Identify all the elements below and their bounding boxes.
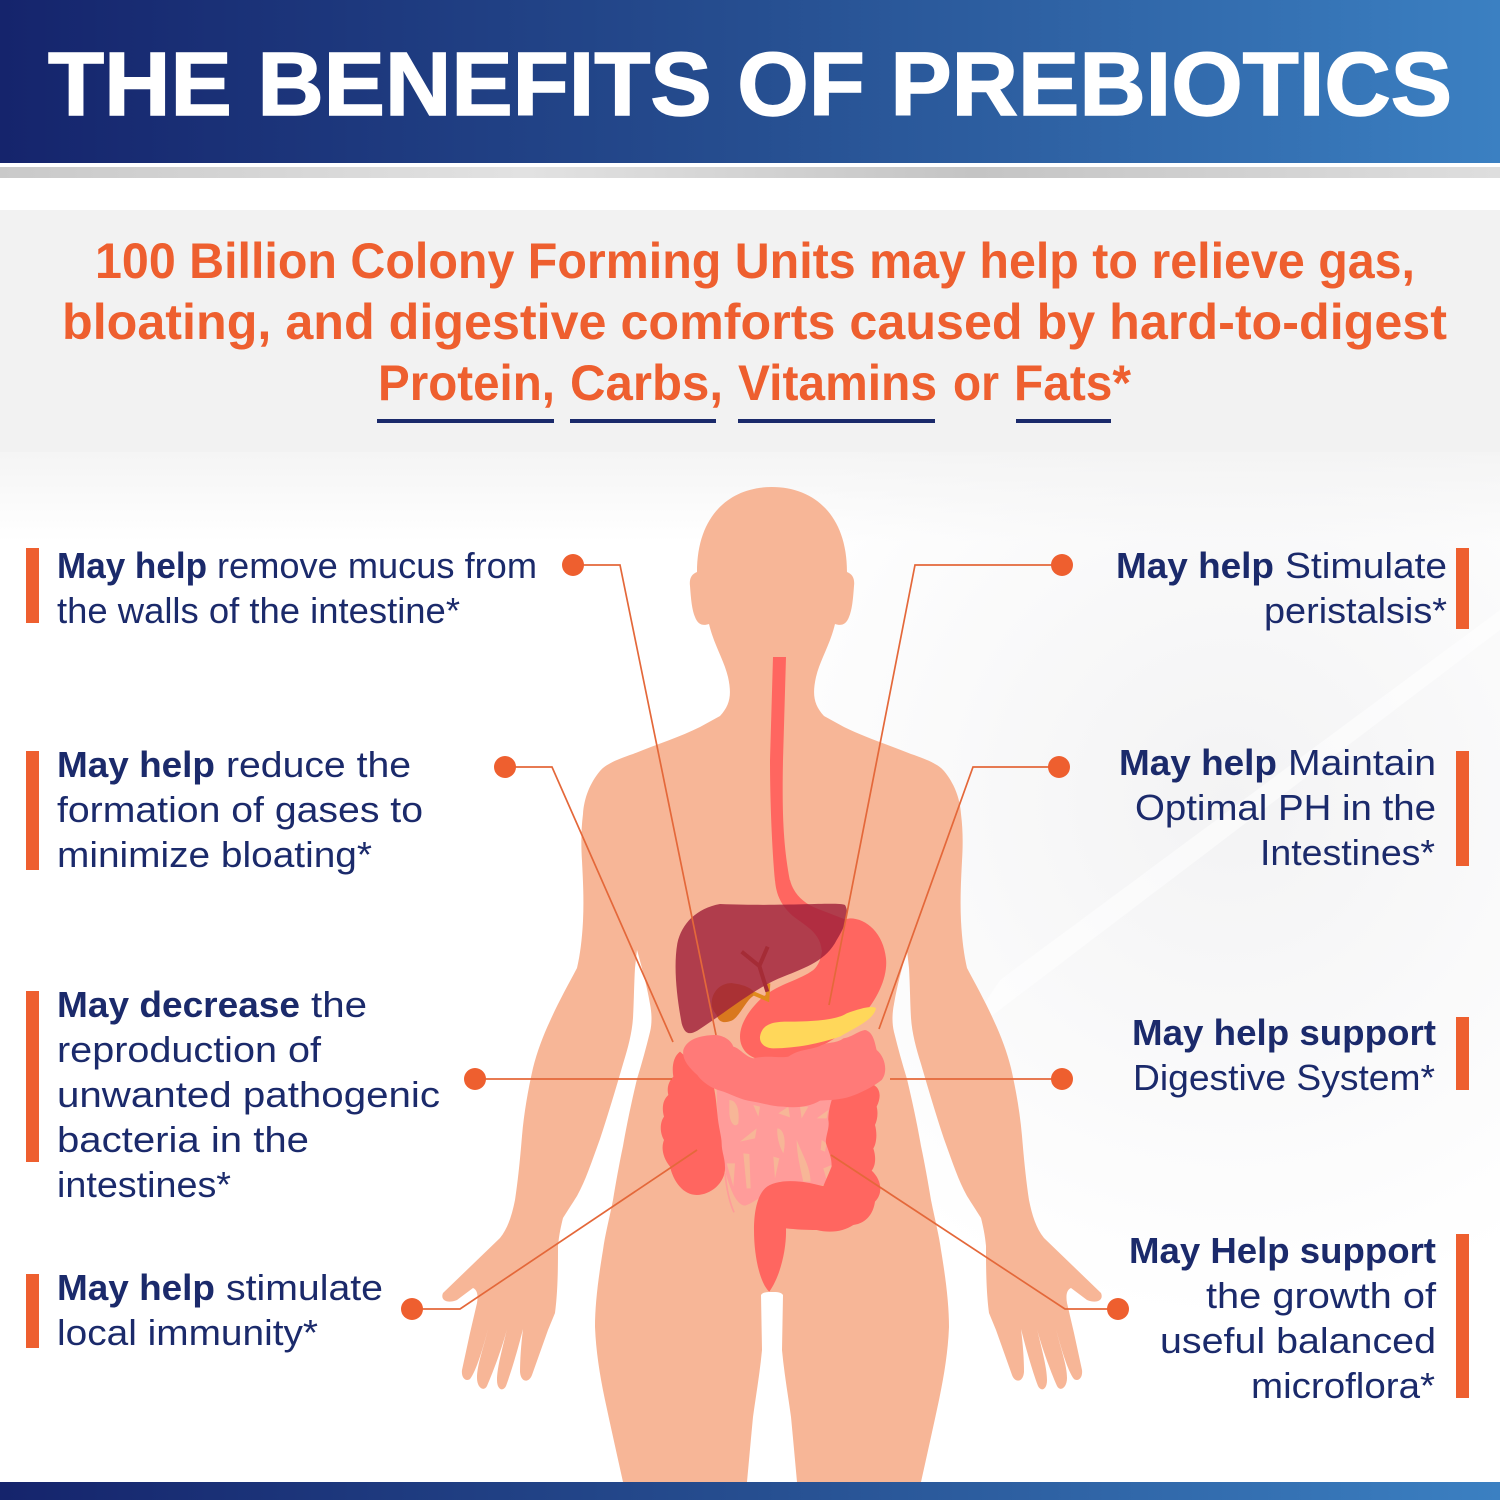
- callout: reduce gases: reduce the: [226, 744, 411, 785]
- callout: pathogenic bacteria: [26, 984, 440, 1205]
- header banner: [0, 0, 1500, 178]
- callout: local immunity: May help: [57, 1267, 215, 1308]
- intro heading line 1: 100 Billion Colony Forming Units may help to relieve gas,: [95, 233, 1415, 289]
- esophagus: [770, 657, 790, 881]
- callout: peristalsis: May help: [1116, 545, 1274, 586]
- panel: intro statement: [0, 210, 1500, 452]
- callout: remove mucus: May help: [57, 545, 207, 586]
- callout: peristalsis: peristalsis*: [1264, 590, 1447, 631]
- intro heading line 3 with underlined nutrients: Fats*: [1014, 355, 1132, 411]
- callout: optimal PH: [1119, 742, 1469, 873]
- callout: reduce gases: formation of gases to: [57, 789, 423, 830]
- callout: microflora: [1129, 1230, 1469, 1406]
- callout: remove mucus: [26, 545, 537, 631]
- callout: reduce gases: minimize bloating*: [57, 834, 372, 875]
- callout: remove mucus: the walls of the intestine*: [57, 590, 460, 631]
- callout: pathogenic bacteria: bacteria in the: [57, 1119, 309, 1160]
- pancreas: [760, 1007, 876, 1048]
- bile ducts: [753, 983, 768, 999]
- stomach: [740, 918, 886, 1060]
- digestive organs: [661, 880, 886, 1292]
- gallbladder: [712, 983, 755, 1022]
- callout: microflora: microflora*: [1251, 1365, 1435, 1406]
- footer bar: [0, 1482, 1500, 1500]
- intro heading line 3 with underlined nutrients: Carbs,: [570, 355, 723, 411]
- callout: reduce gases: [26, 744, 423, 875]
- hepatic veins: [742, 947, 768, 992]
- callout: microflora: May Help support: [1129, 1230, 1436, 1271]
- small intestine: [717, 1090, 835, 1212]
- callout: peristalsis: Stimulate: [1285, 545, 1447, 586]
- callout: digestive system: May help support: [1132, 1012, 1436, 1053]
- callout: local immunity: stimulate: [226, 1267, 383, 1308]
- callout: peristalsis: [1116, 545, 1469, 631]
- liver: [676, 904, 847, 1033]
- callout: remove mucus: remove mucus from: [217, 545, 537, 586]
- callout: microflora: useful balanced: [1160, 1320, 1436, 1361]
- descending colon and rectum: [754, 1083, 880, 1292]
- callout: optimal PH: Intestines*: [1260, 832, 1435, 873]
- leader lines: [412, 565, 1118, 1309]
- callout: optimal PH: Maintain: [1288, 742, 1436, 783]
- callout: optimal PH: Optimal PH in the: [1135, 787, 1436, 828]
- ascending colon: [661, 1052, 725, 1195]
- intro heading line 3 with underlined nutrients: Protein,: [378, 355, 555, 411]
- intro heading line 3 with underlined nutrients: Vitamins: [738, 355, 937, 411]
- callout: pathogenic bacteria: reproduction of: [57, 1029, 322, 1070]
- callout dots: [401, 554, 1129, 1320]
- callout: digestive system: Digestive System*: [1133, 1057, 1435, 1098]
- callout: pathogenic bacteria: May decrease: [57, 984, 300, 1025]
- callout: reduce gases: May help: [57, 744, 215, 785]
- callout: pathogenic bacteria: the: [311, 984, 367, 1025]
- callout: local immunity: local immunity*: [57, 1312, 318, 1353]
- callout: local immunity: [26, 1267, 383, 1353]
- title: THE BENEFITS OF PREBIOTICS: [48, 35, 1452, 135]
- callout: microflora: the growth of: [1206, 1275, 1437, 1316]
- lower esophagus: [775, 880, 847, 950]
- transverse colon: [683, 1030, 885, 1107]
- body silhouette: [442, 487, 1102, 1482]
- callout: pathogenic bacteria: unwanted pathogenic: [57, 1074, 440, 1115]
- callout: pathogenic bacteria: intestines*: [57, 1164, 231, 1205]
- intro heading line 3 with underlined nutrients: [377, 355, 1132, 423]
- intro heading line 2: bloating, and digestive comforts caused by hard-to-digest: [62, 294, 1447, 350]
- intro heading line 3 with underlined nutrients: or: [953, 355, 999, 411]
- callout: optimal PH: May help: [1119, 742, 1277, 783]
- callout: digestive system: [1132, 1012, 1469, 1098]
